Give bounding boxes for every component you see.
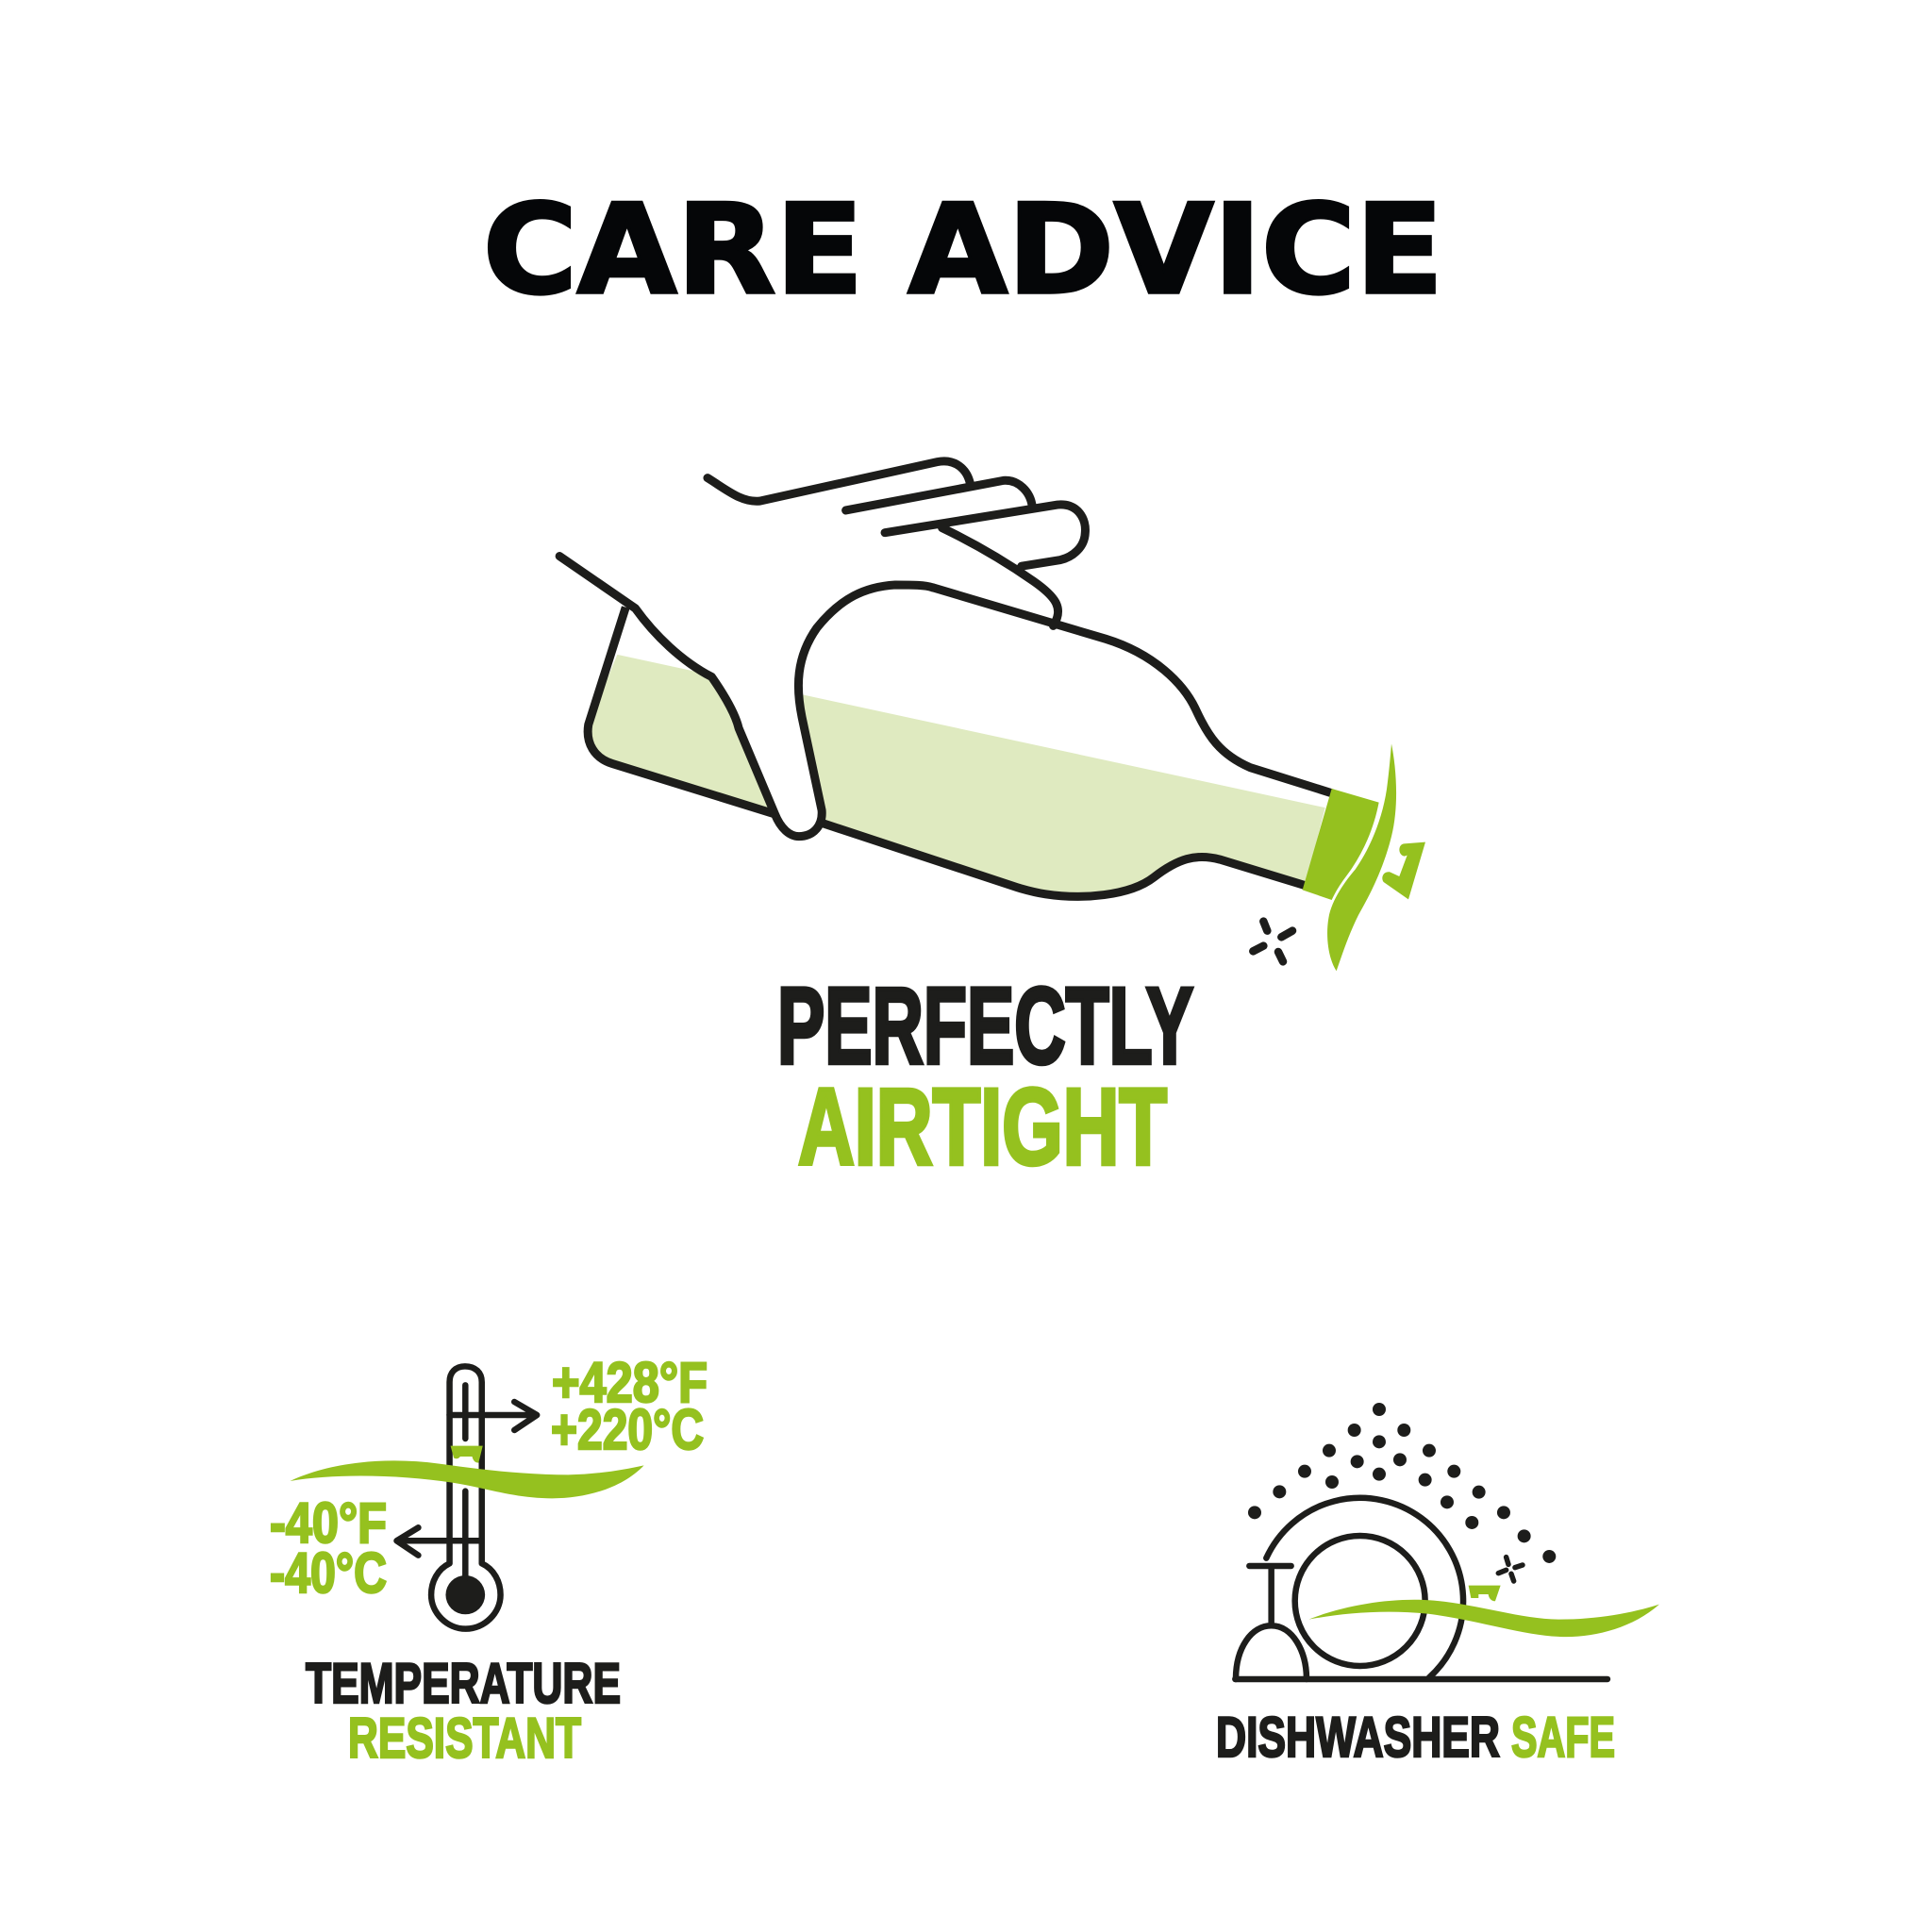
bottle cap, leaf and sparkle	[1253, 743, 1425, 971]
wine glass	[1236, 1566, 1307, 1679]
heading: perfectly: PERFECTLY	[777, 966, 1193, 1087]
label: +428°F: +428°F	[552, 1351, 708, 1414]
green cap fragment	[1382, 842, 1425, 899]
hand white fill	[635, 545, 932, 837]
plate rim	[1266, 1498, 1463, 1677]
green fragment	[451, 1446, 483, 1463]
green swoosh	[290, 1460, 644, 1498]
counter line	[1235, 1676, 1607, 1682]
water droplets	[1248, 1403, 1556, 1563]
fingers	[708, 461, 1085, 625]
green fragment	[1469, 1586, 1501, 1601]
icon: hand tilting airtight bottle	[559, 461, 1425, 971]
sparkle	[1498, 1557, 1523, 1581]
heading: dishwasher: DISHWASHER	[1216, 1706, 1500, 1769]
hand and thumb outline	[559, 557, 932, 837]
bottle liquid	[588, 655, 1325, 896]
bottle and hand line art	[559, 461, 1333, 896]
plate centre	[1295, 1536, 1425, 1666]
green swoosh	[1308, 1600, 1659, 1637]
heading: resistant: RESISTANT	[348, 1707, 581, 1770]
heading: airtight: AIRTIGHT	[798, 1067, 1167, 1188]
mercury line	[462, 1385, 469, 1578]
label: +220°C: +220°C	[551, 1398, 704, 1461]
heading: temperature: TEMPERATURE	[306, 1652, 621, 1715]
title: CARE ADVICE	[483, 177, 1443, 322]
green leaf swoosh	[1327, 743, 1396, 971]
icon: thermometer	[290, 1366, 644, 1629]
bottle outline	[588, 588, 1333, 896]
label: -40°C: -40°C	[270, 1541, 387, 1605]
heading: safe: SAFE	[1511, 1706, 1615, 1769]
thermometer body	[431, 1366, 501, 1629]
sparkle	[1253, 922, 1292, 961]
icon: dishwasher plate and glass	[1235, 1403, 1659, 1679]
label: -40°F: -40°F	[270, 1491, 387, 1555]
green bottle cap	[1303, 789, 1379, 900]
arrow: low temperature	[397, 1527, 481, 1556]
arrow: high temperature	[450, 1402, 537, 1430]
thermometer bulb	[445, 1575, 485, 1614]
